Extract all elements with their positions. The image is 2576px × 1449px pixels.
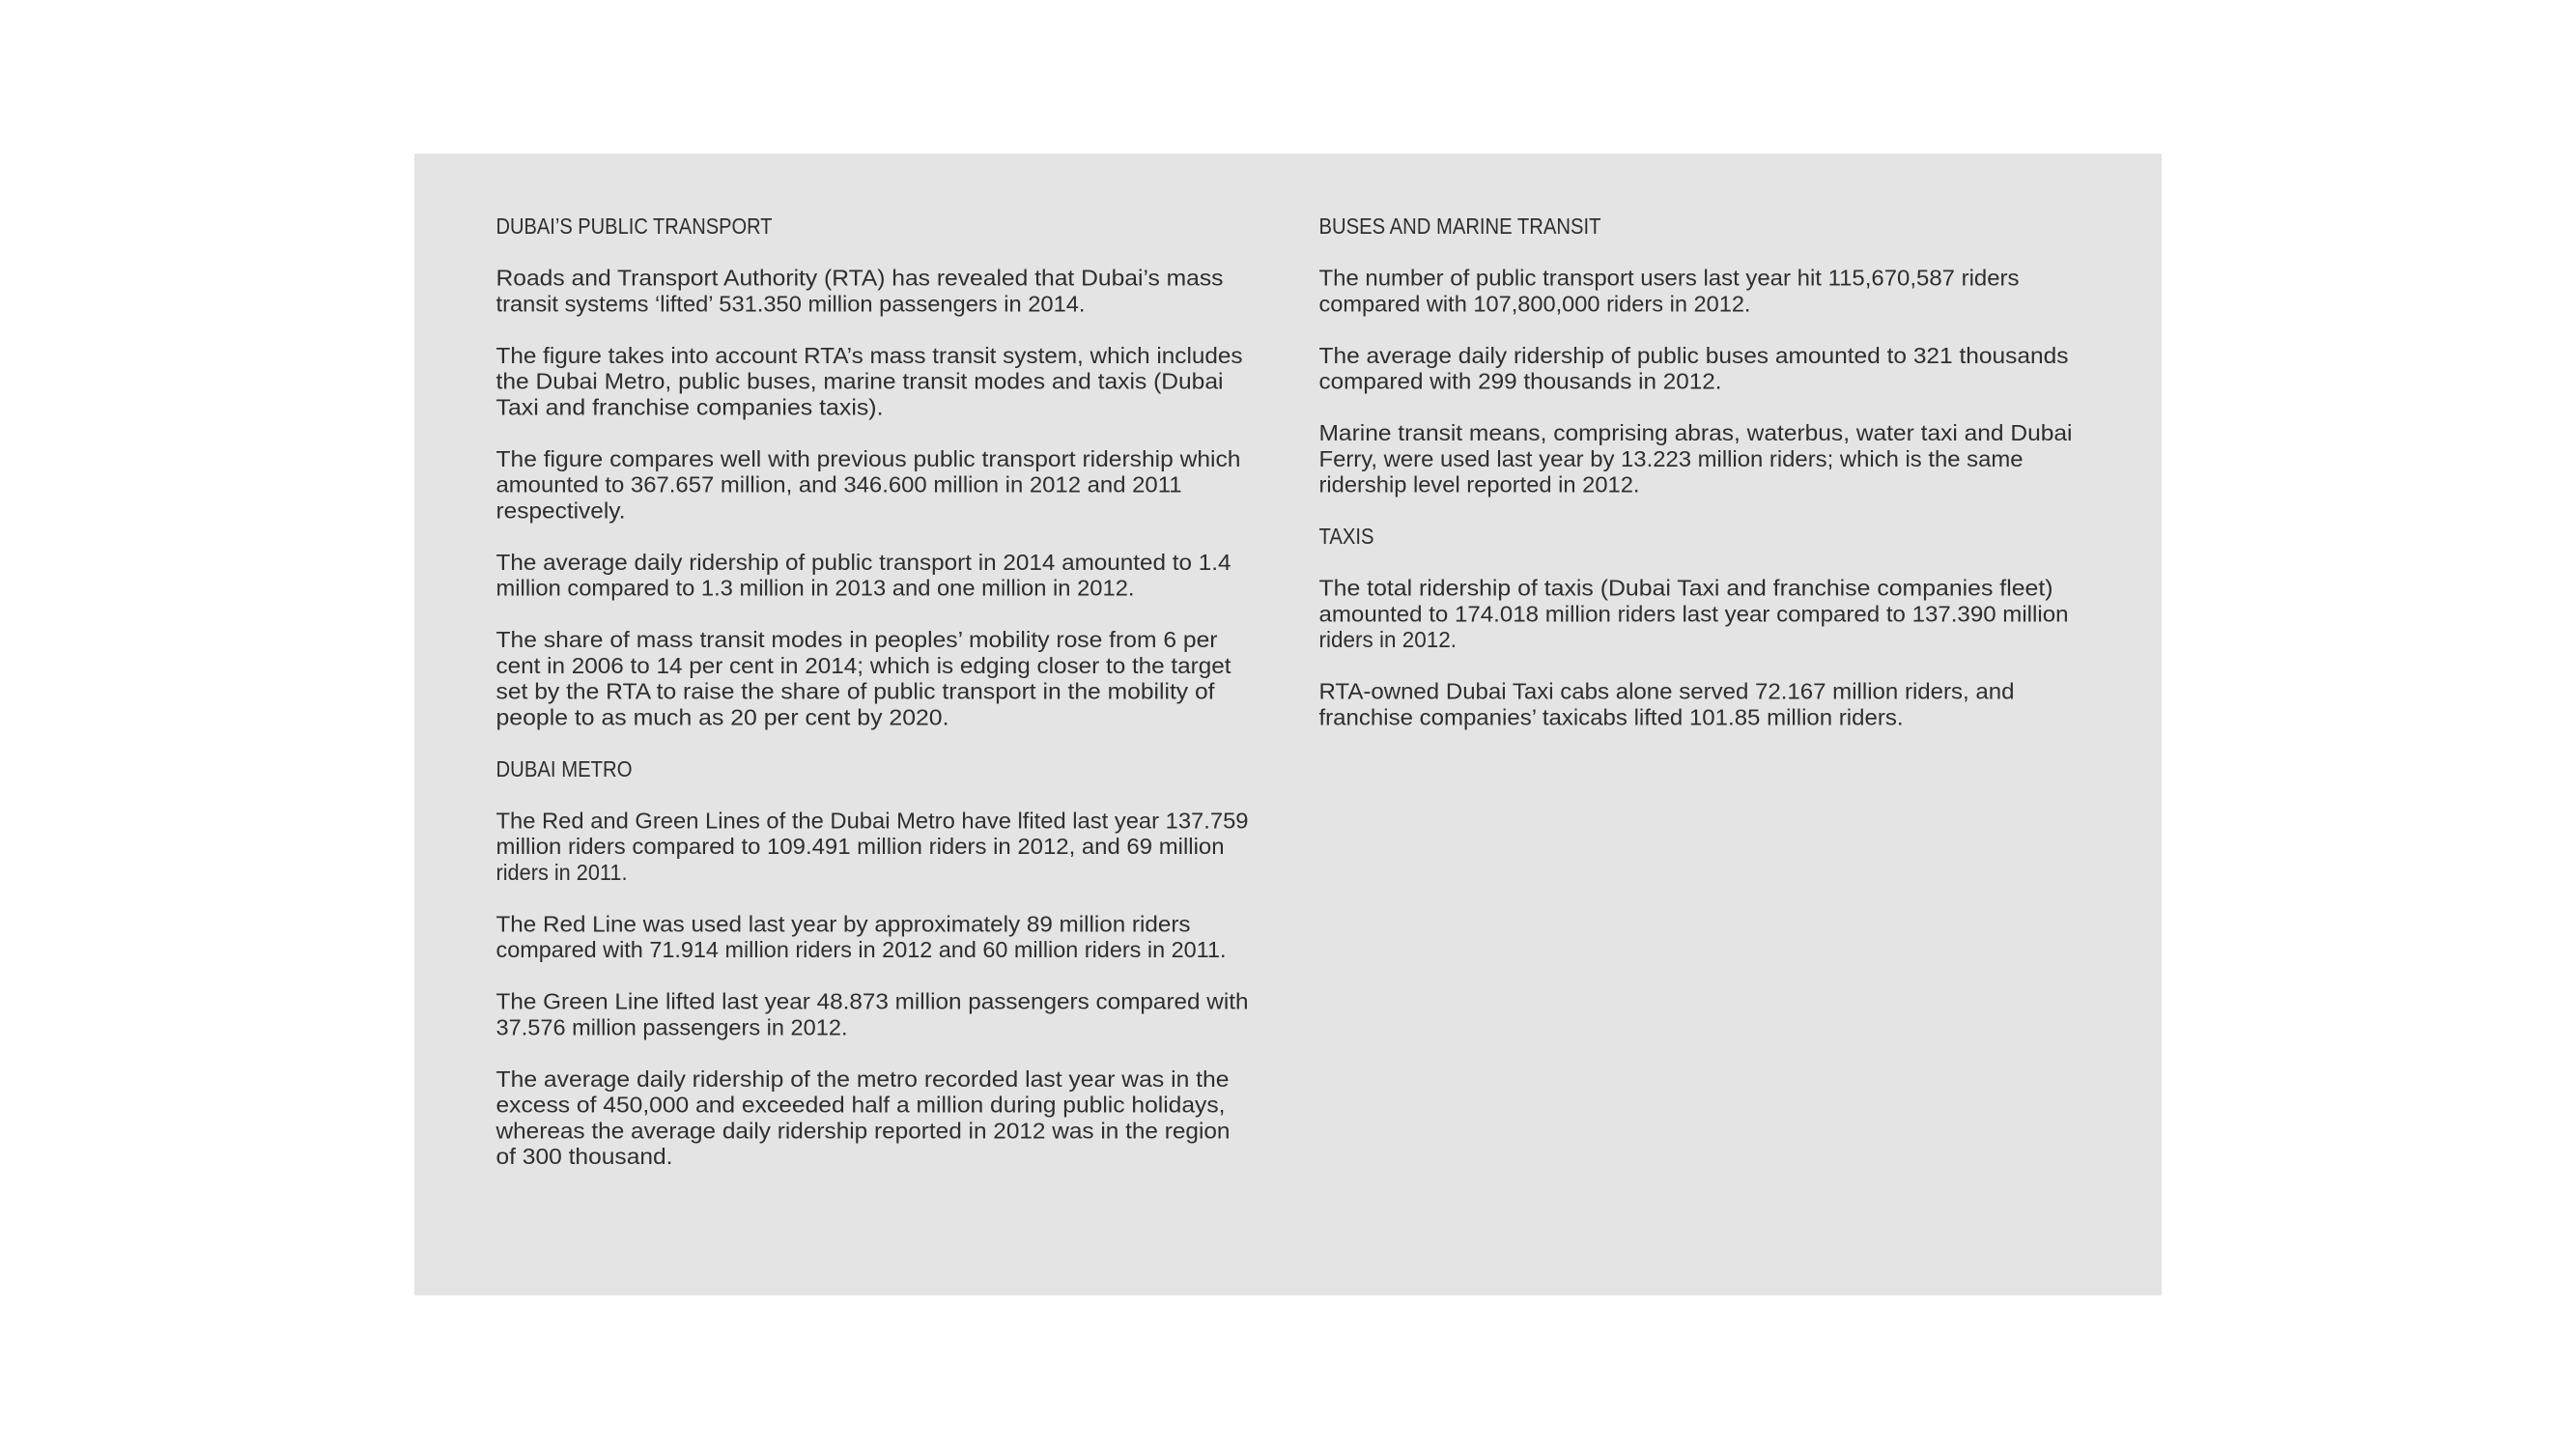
paragraph: public transport users: The number of public transport users last year hit 115,670,587 riders <box>1319 265 2019 290</box>
right column <box>1319 213 2073 729</box>
paragraph: Dubai Taxi and franchise cabs: franchise companies’ taxicabs lifted 101.85 million riders. <box>1319 704 1903 729</box>
paragraph: Red Line <box>496 911 1227 962</box>
paragraph: marine transit: Ferry, were used last year by 13.223 million riders; which is the same <box>1319 446 2023 471</box>
panel: grey background <box>414 154 2162 1295</box>
paragraph: share of mass transit <box>496 627 1231 729</box>
paragraph: share of mass transit: set by the RTA to raise the share of public transport in the mobility of <box>496 678 1215 703</box>
paragraph: metro daily ridership: The average daily ridership of the metro recorded last year was in the <box>496 1066 1229 1092</box>
paragraph: Green Line: 37.576 million passengers in 2012. <box>496 1014 848 1039</box>
paragraph: average daily ridership <box>496 550 1231 601</box>
paragraph: share of mass transit: people to as much as 20 per cent by 2020. <box>496 704 948 729</box>
paragraph: metro daily ridership: of 300 thousand. <box>496 1144 672 1169</box>
paragraph: comparison with previous years <box>496 446 1240 523</box>
heading: Dubai's public transport: DUBAI’S PUBLIC TRANSPORT <box>496 213 773 239</box>
paragraph: Red and Green Lines: riders in 2011. <box>496 860 628 885</box>
paragraph: what the figure includes: the Dubai Metro, public buses, marine transit modes and taxis (Dubai <box>496 369 1223 394</box>
paragraph: total passengers <box>496 265 1223 316</box>
paragraph: Dubai Taxi and franchise cabs <box>1319 678 2015 729</box>
paragraph: total taxi ridership: riders in 2012. <box>1319 627 1457 652</box>
paragraph: public buses daily ridership <box>1319 343 2069 394</box>
paragraph: metro daily ridership <box>495 1066 1231 1169</box>
paragraph: total passengers: transit systems ‘lifted’ 531.350 million passengers in 2014. <box>496 291 1086 316</box>
paragraph: metro daily ridership: excess of 450,000 and exceeded half a million during public holidays, <box>496 1092 1225 1117</box>
paragraph: marine transit <box>1319 420 2073 497</box>
heading: Dubai Metro: DUBAI METRO <box>496 756 632 781</box>
paragraph: comparison with previous years: amounted to 367.657 million, and 346.600 million in 2012 and 2011 <box>496 471 1182 497</box>
paragraph: share of mass transit: cent in 2006 to 14 per cent in 2014; which is edging closer to the target <box>496 653 1231 678</box>
paragraph: what the figure includes <box>496 343 1242 419</box>
paragraph: comparison with previous years: The figure compares well with previous public transport ridership which <box>496 446 1240 471</box>
paragraph: comparison with previous years: respectively. <box>496 497 626 523</box>
paragraph: public transport users <box>1319 265 2019 316</box>
paragraph: marine transit: Marine transit means, comprising abras, waterbus, water taxi and Dubai <box>1319 420 2073 445</box>
paragraph: average daily ridership: The average daily ridership of public transport in 2014 amounted to 1.4 <box>496 550 1231 575</box>
paragraph: Red Line: The Red Line was used last year by approximately 89 million riders <box>496 911 1190 936</box>
paragraph: share of mass transit: The share of mass transit modes in peoples’ mobility rose from 6 per <box>496 627 1218 652</box>
paragraph: total taxi ridership <box>1319 576 2069 652</box>
paragraph: total passengers: Roads and Transport Authority (RTA) has revealed that Dubai’s mass <box>496 265 1223 290</box>
paragraph: Red and Green Lines <box>496 808 1248 885</box>
paragraph: average daily ridership: million compared to 1.3 million in 2013 and one million in 2012. <box>496 576 1134 601</box>
paragraph: Green Line <box>496 989 1248 1039</box>
paragraph: Red and Green Lines: The Red and Green Lines of the Dubai Metro have lfited last year 137.759 <box>496 808 1248 833</box>
heading: buses and marine transit: BUSES AND MARINE TRANSIT <box>1319 213 1601 239</box>
paragraph: what the figure includes: Taxi and franchise companies taxis). <box>496 394 883 419</box>
paragraph: metro daily ridership: whereas the average daily ridership reported in 2012 was in the region <box>495 1118 1231 1143</box>
paragraph: marine transit: ridership level reported in 2012. <box>1319 471 1640 497</box>
paragraph: total taxi ridership: amounted to 174.018 million riders last year compared to 137.390 million <box>1319 601 2069 626</box>
heading: taxis: TAXIS <box>1319 524 1373 549</box>
paragraph: Dubai Taxi and franchise cabs: RTA-owned Dubai Taxi cabs alone served 72.167 million riders, and <box>1319 678 2015 703</box>
left column <box>495 213 1248 1169</box>
paragraph: what the figure includes: The figure takes into account RTA’s mass transit system, which includes <box>496 343 1242 368</box>
paragraph: public buses daily ridership: The average daily ridership of public buses amounted to 321 thousands <box>1319 343 2069 368</box>
paragraph: Red and Green Lines: million riders compared to 109.491 million riders in 2012, and 69 million <box>496 834 1225 859</box>
paragraph: Green Line: The Green Line lifted last year 48.873 million passengers compared with <box>496 989 1248 1014</box>
paragraph: total taxi ridership: The total ridership of taxis (Dubai Taxi and franchise companies fleet) <box>1319 576 2053 601</box>
paragraph: public buses daily ridership: compared with 299 thousands in 2012. <box>1319 369 1721 394</box>
paragraph: Red Line: compared with 71.914 million riders in 2012 and 60 million riders in 2011. <box>496 937 1227 962</box>
paragraph: public transport users: compared with 107,800,000 riders in 2012. <box>1319 291 1750 316</box>
